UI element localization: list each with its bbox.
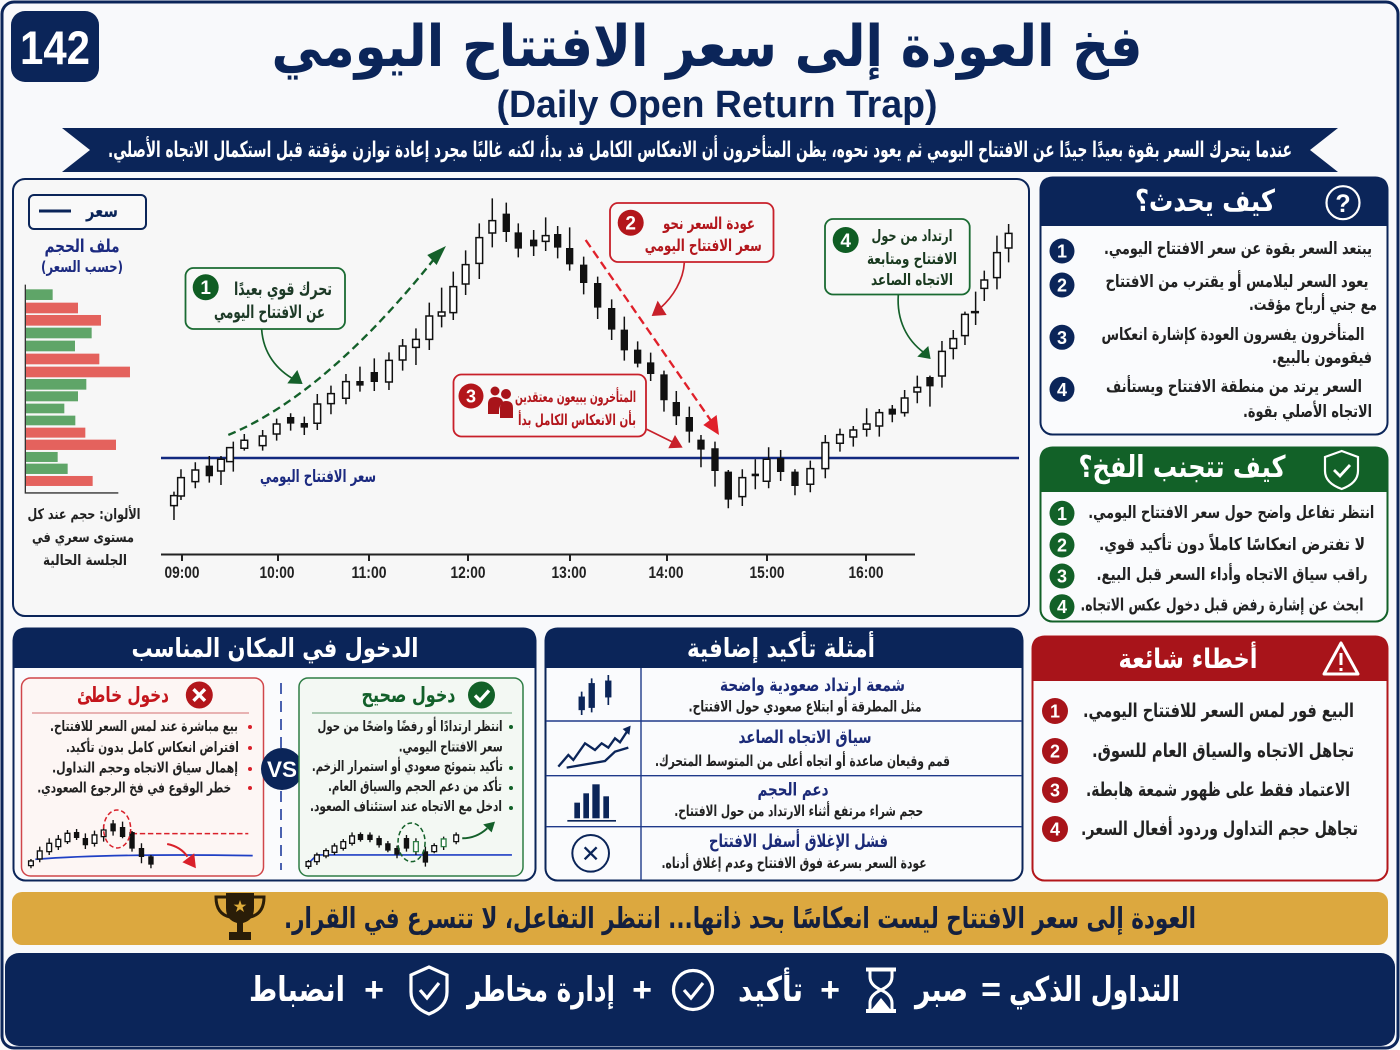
panel: extra confirmation examples [545,628,1023,880]
row: reversal candle: مثل المطرقة أو ابتلاع صعودي حول الافتتاح. [688,697,922,717]
list: mistakes: 4 [1050,820,1060,840]
icon: people [488,386,513,418]
icon: cross [186,682,213,708]
icon: question: ? [1335,190,1351,218]
sub-panel: wrong entry [22,678,264,876]
badge: VS: VS [267,757,297,782]
row: uptrend context [558,726,950,770]
sub-panel: correct entry [299,678,523,876]
callout 4 [825,219,970,294]
banner: smart trading formula [5,953,1395,1046]
panel: entering at the right place [13,628,536,880]
text: volume colour note: الألوان: حجم عند كل [28,505,140,523]
legend: price line: سعر [85,201,118,222]
arrow: dashed green up-move [228,246,446,435]
callout 4: الاتجاه الصاعد [871,271,953,289]
icon: trophy [216,893,264,940]
icon: question [1326,186,1360,219]
sub-panel: correct entry: سعر الافتتاح اليومي. [399,740,503,756]
callout 2: عودة السعر نحو [662,214,755,234]
row: volume support: دعم الحجم [758,780,828,801]
banner: smart trading formula: صبر [913,970,968,1010]
arrow: callout 3 pointer [647,429,683,448]
panel: entering at the right place: الدخول في المكان المناسب [132,634,418,664]
list: avoid steps: 1 [1057,504,1067,524]
chart: time axis: 11:00 [352,563,386,582]
panel: main chart [13,179,1029,616]
row: reversal candle: شمعة ارتداد صعودية واضحة [720,675,905,696]
intro ribbon [62,128,1338,172]
sub-panel: correct entry: انتظر ارتدادًا أو رفضًا واضحًا من حول [318,717,502,735]
row: failed close below open: فشل الإغلاق أسفل الافتتاح [709,829,888,852]
subtitle: (Daily Open Return Trap) [496,84,938,126]
callout 4: الافتتاح ومتابعة [867,250,957,268]
list: how steps: 2 [1057,276,1067,296]
sub-panel: correct entry: تأكد من دعم الحجم والسياق العام. [328,777,502,795]
icon: candles [579,675,611,715]
arrow: callout 2 pointer [652,263,684,316]
arrow: dashed red down-move [586,240,719,435]
banner: smart trading formula: انضباط [249,970,345,1010]
chart: correct entry mini chart [306,822,512,869]
sub-panel: correct entry: ادخل مع الاتجاه عند استئناف الصعود. [310,799,502,815]
icon: shield [411,967,447,1014]
list: how steps: 1 [1057,242,1067,262]
list: mistakes [1042,698,1358,842]
arrow: callout 1 pointer [262,329,303,384]
sub-panel: wrong entry: خطر الوقوع في فخ الرجوع الصعودي. [37,781,231,798]
banner: smart trading formula: تأكيد [738,967,803,1010]
callout 2 [610,203,774,262]
icon: trend [558,726,631,768]
callout 1: عن الافتتاح اليومي [214,302,325,323]
sub-panel: wrong entry: إهمال سياق الاتجاه وحجم التداول. [52,761,238,777]
list: how steps [1050,238,1377,422]
row: reversal candle [579,675,922,717]
title: فخ العودة إلى سعر الافتتاح اليومي [272,14,1142,81]
icon: hourglass [866,970,896,1011]
banner: smart trading formula: إدارة مخاطر [466,970,615,1010]
heading: volume profile [41,236,123,276]
callout 4: ارتداد من حول [872,227,952,245]
row: uptrend context: قمم وقيعان صاعدة أو اتجاه أعلى من المتوسط المتحرك. [655,751,950,770]
chart: time axis [161,554,915,582]
chart: time axis: 14:00 [648,563,684,582]
icon: check [468,682,495,708]
panel: common mistakes [1032,636,1388,880]
row: volume support: حجم شراء مرتفع أثناء الارتداد من حول الافتتاح. [674,801,923,820]
icon: circled x [572,835,609,872]
sub-panel: correct entry: تأكيد بتموئج صعودي أو استمرار الزخم. [312,757,503,776]
callout 4: 4 [840,231,851,252]
sub-panel: correct entry: دخول صحيح [362,683,456,707]
badge: 142: 142 [20,21,90,74]
chart: time axis: 15:00 [750,563,784,582]
callout 1: 1 [200,278,211,299]
list: avoid steps: 3 [1057,566,1067,586]
banner: smart trading formula: + [364,971,384,1009]
chart: time axis: 10:00 [260,563,294,582]
list: avoid steps [1050,501,1374,619]
panel: how to avoid the trap [1040,447,1388,622]
banner: smart trading formula: = [981,971,1001,1009]
row: uptrend context: سياق الاتجاه الصاعد [738,727,872,748]
badge: 142 [11,11,99,82]
panel: extra confirmation examples: أمثلة تأكيد إضافية [687,631,875,664]
label: daily open price: سعر الافتتاح اليومي [260,467,376,487]
chart: volume profile bars [25,285,130,493]
callout 3 [454,374,646,436]
text: volume colour note: مستوى سعري في [32,530,134,547]
row: failed close below open: عودة السعر بسرعة فوق الافتتاح وعدم إغلاق أدناه. [662,853,926,872]
panel: how it happens: كيف يحدث؟ [1135,184,1275,219]
banner: smart trading formula: التداول الذكي [1009,970,1180,1010]
chart: time axis: 09:00 [164,563,200,582]
callout 2: 2 [625,214,636,234]
callout 3: المتأخرون يبيعون معتقدين [515,387,636,406]
legend: price line [29,195,146,229]
panel: how it happens [1040,177,1388,434]
list: mistakes: 1 [1050,702,1060,722]
arrow: callout 4 pointer [898,295,931,359]
divider: versus dashed line [280,683,282,870]
list: mistakes: 3 [1050,780,1060,800]
sub-panel: wrong entry: بيع مباشرة عند لمس السعر للافتتاح. [50,719,238,735]
list: how steps: 3 [1057,328,1067,348]
callout 1 [186,268,345,329]
icon: warning [1324,643,1358,674]
badge: VS [261,748,303,790]
list: avoid steps: 4 [1057,597,1067,617]
banner: smart trading formula: + [632,971,652,1009]
callout 3: بأن الانعكاس الكامل بدأ [518,410,636,429]
row: volume support [567,780,923,822]
icon: check circle [674,970,712,1010]
list: avoid steps: 2 [1057,536,1067,556]
row: failed close below open [572,829,926,872]
line: daily open price [161,457,1019,459]
icon: shield check [1325,451,1358,489]
panel: how to avoid the trap: كيف تتجنب الفخ؟ [1078,450,1286,485]
list: mistakes: 2 [1050,742,1060,762]
panel: common mistakes: أخطاء شائعة [1118,641,1258,675]
callout 1: تحرك قوي بعيدًا [234,279,332,300]
list: how steps: 4 [1057,380,1067,400]
chart: candlesticks [171,198,1012,520]
banner: smart trading formula: + [820,971,840,1009]
sub-panel: wrong entry: دخول خاطئ [77,683,169,707]
heading: volume profile: ملف الحجم [44,236,120,257]
text: volume colour note [28,505,140,569]
chart: time axis: 16:00 [848,563,884,582]
chart: time axis: 13:00 [552,563,586,582]
chart: time axis: 12:00 [450,563,486,582]
heading: volume profile: (حسب السعر) [41,258,123,276]
banner: gold takeaway [12,892,1388,945]
icon: bars [567,784,616,822]
chart: wrong entry mini chart [29,810,253,868]
callout 2: سعر الافتتاح اليومي [645,236,762,256]
text: volume colour note: الجلسة الحالية [43,553,127,569]
callout 3: 3 [466,386,476,406]
sub-panel: wrong entry: افتراض انعكاس كامل بدون تأكيد. [66,738,239,756]
